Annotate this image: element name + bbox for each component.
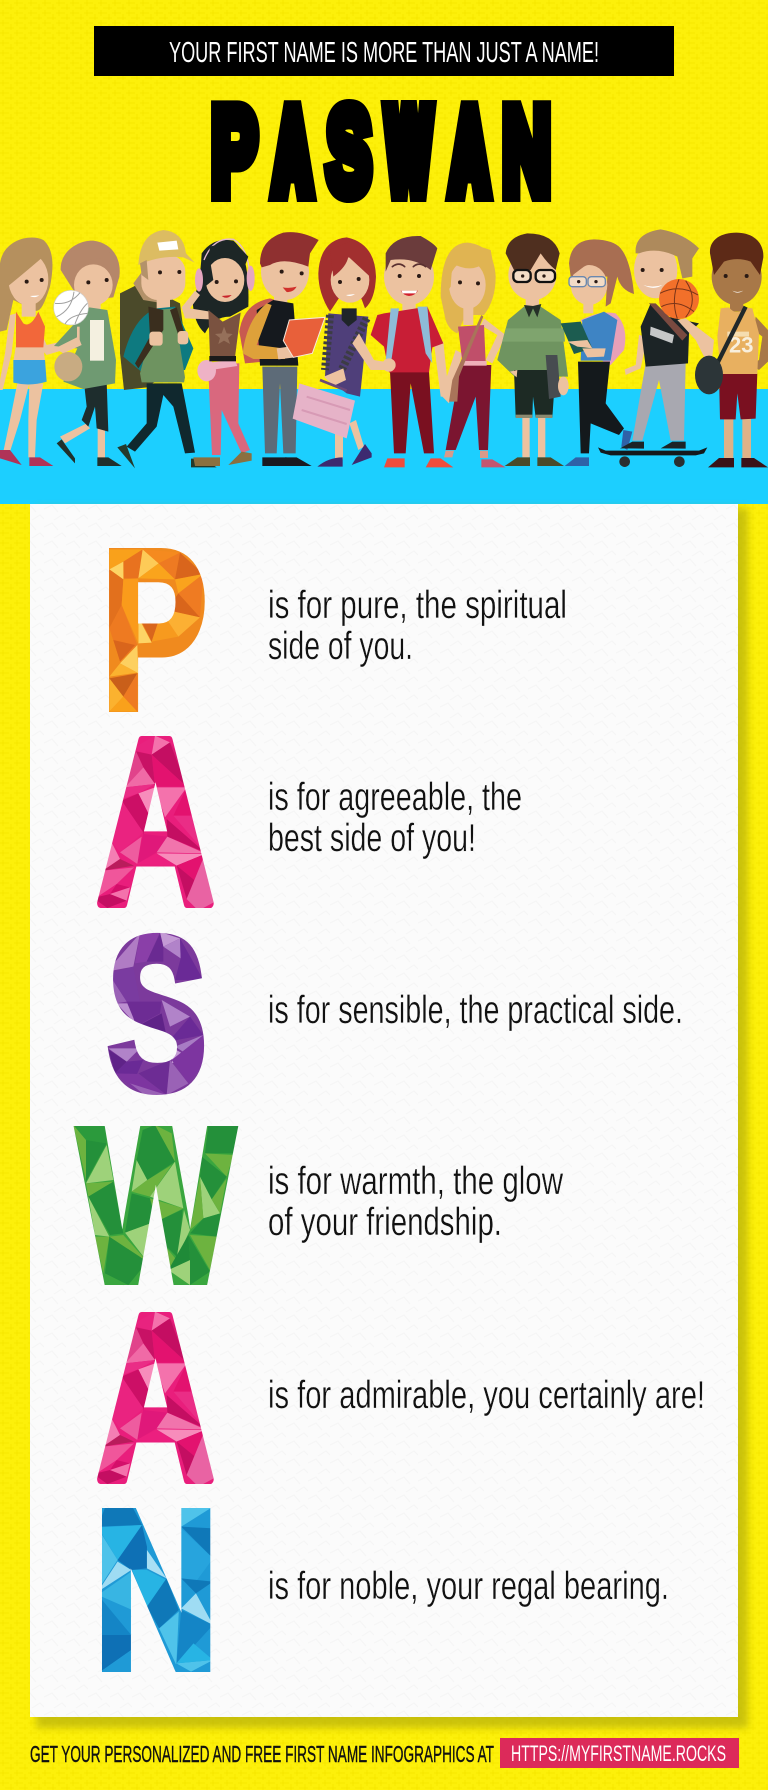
title: PASWAN: A bbox=[452, 92, 486, 210]
letter W row bbox=[73, 1123, 574, 1287]
description A: best side of you! bbox=[268, 817, 476, 860]
person 8: blonde girl with maroon trousers bbox=[441, 243, 506, 467]
description A: is for agreeable, the bbox=[268, 776, 522, 819]
group of young people illustration bbox=[0, 229, 768, 468]
person 12: boy in jersey with shoulder bag: 23 bbox=[729, 333, 753, 358]
person 4: girl with headphones bbox=[182, 239, 255, 466]
top banner bbox=[94, 26, 674, 76]
description W: of your friendship. bbox=[268, 1201, 502, 1244]
description P: is for pure, the spiritual bbox=[268, 584, 567, 627]
title: PASWAN: A bbox=[276, 92, 310, 210]
low-poly letter S bbox=[107, 930, 207, 1097]
second letter A row bbox=[90, 1308, 705, 1488]
letter N row bbox=[98, 1507, 669, 1673]
right half of the group bbox=[352, 229, 768, 467]
title: PASWAN: W bbox=[387, 90, 430, 213]
left half of the group bbox=[0, 230, 376, 468]
low-poly letter P bbox=[107, 547, 207, 713]
description P: side of you. bbox=[268, 625, 413, 668]
title: PASWAN: N bbox=[502, 83, 551, 219]
white card panel bbox=[30, 504, 738, 1717]
person 9: boy with glasses and shorts bbox=[497, 233, 569, 466]
low-poly letter N bbox=[98, 1507, 213, 1673]
person 3: hiker with yellow cap bbox=[117, 230, 217, 468]
letter P row bbox=[107, 547, 578, 713]
person 1: girl with orange top bbox=[0, 238, 80, 466]
letter S row bbox=[107, 930, 683, 1097]
low-poly letter A bbox=[97, 1312, 214, 1484]
low-poly letter W bbox=[73, 1123, 240, 1287]
person 2: girl with volleyball bbox=[54, 241, 122, 466]
person 6: girl with pink case bbox=[293, 237, 376, 467]
description W: is for warmth, the glow bbox=[268, 1160, 564, 1203]
letter A row bbox=[90, 732, 533, 912]
person 10: girl with tablet and ponytail bbox=[561, 239, 634, 466]
title: PASWAN: P bbox=[212, 83, 257, 219]
person 12: boy in jersey with shoulder bag bbox=[695, 233, 768, 467]
person 7: boy in red shirt bbox=[352, 236, 453, 467]
low-poly letter A bbox=[97, 736, 214, 908]
icon: skateboard bbox=[598, 447, 707, 467]
footer call to action bbox=[30, 1738, 739, 1768]
title: PASWAN: S bbox=[327, 83, 371, 219]
person 5: boy reading a red book bbox=[239, 232, 325, 466]
card shadow bbox=[36, 508, 748, 1728]
blue floor band bbox=[0, 389, 768, 504]
person 11: skateboarder with basketball bbox=[598, 229, 714, 467]
